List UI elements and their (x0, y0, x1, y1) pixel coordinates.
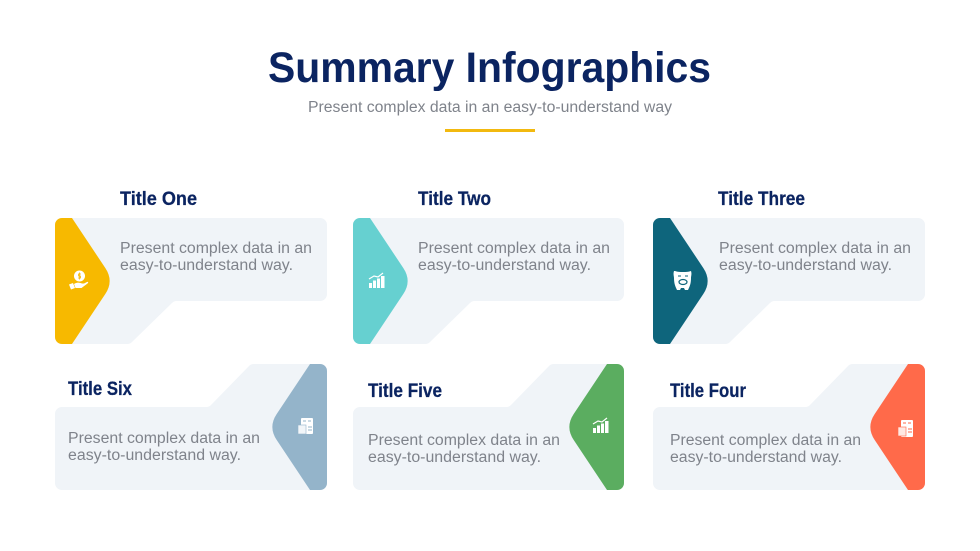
panel: Title One (55, 189, 327, 344)
body text: easy-to-understand way. (120, 257, 293, 274)
card background (653, 218, 925, 344)
panel: Title Five (353, 364, 624, 490)
icon: piggy bank (674, 271, 691, 290)
card background (353, 364, 624, 490)
panel: Title Two (353, 189, 624, 344)
title underline (445, 129, 535, 132)
card background (55, 364, 327, 490)
body text: easy-to-understand way. (418, 257, 591, 274)
heading: Title Two (418, 189, 491, 210)
panel: Title Six (55, 364, 327, 490)
body text: easy-to-understand way. (368, 449, 541, 466)
card background (353, 218, 624, 344)
card background (55, 218, 327, 344)
colored arrow (55, 218, 110, 344)
body text: Present complex data in an (68, 430, 260, 447)
colored arrow (870, 364, 925, 490)
heading: Title One (120, 189, 197, 210)
colored arrow (272, 364, 327, 490)
body text: Present complex data in an (368, 432, 560, 449)
panel: Title Three (653, 189, 925, 344)
body text: easy-to-understand way. (68, 447, 241, 464)
heading: Title Six (68, 379, 132, 400)
icon: documents (298, 418, 313, 434)
body text: Present complex data in an (120, 240, 312, 257)
body text: Present complex data in an (719, 240, 911, 257)
heading: Title Five (368, 381, 442, 402)
colored arrow (653, 218, 708, 344)
panel: Title Four (653, 364, 925, 490)
icon: hand holding coin (69, 270, 88, 290)
icon: bar chart (369, 273, 384, 288)
title: Summary Infographics (268, 44, 711, 92)
body text: Present complex data in an (670, 432, 861, 449)
body text: Present complex data in an (418, 240, 610, 257)
card background (653, 364, 925, 490)
colored arrow (353, 218, 408, 344)
heading: Title Four (670, 381, 747, 402)
heading: Title Three (718, 189, 805, 210)
colored arrow (569, 364, 624, 490)
body text: easy-to-understand way. (719, 257, 892, 274)
icon: documents (898, 420, 913, 437)
subtitle: Present complex data in an easy-to-understand way (308, 99, 672, 116)
icon: bar chart (593, 418, 608, 433)
body text: easy-to-understand way. (670, 449, 842, 466)
